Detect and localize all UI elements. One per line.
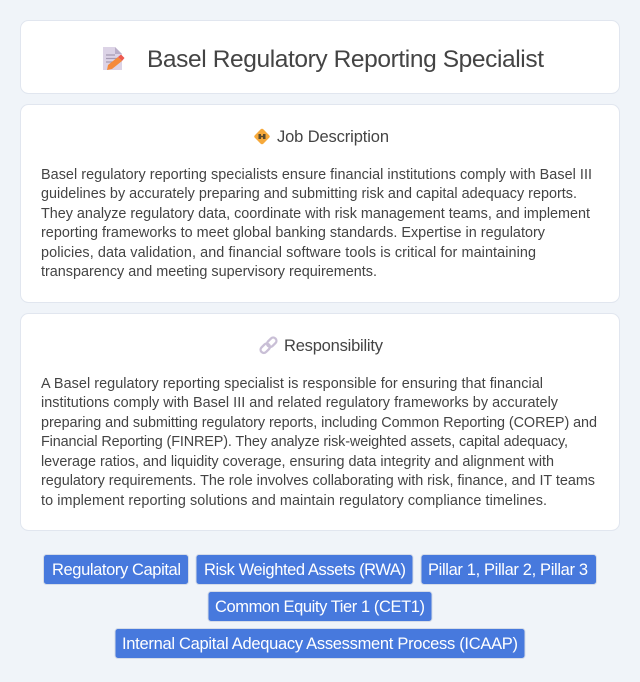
- text block: responsibility: Financial Reporting (FINREP). They analyze risk-weighted assets, capital adequacy,: [41, 434, 568, 450]
- text block: job description: [41, 167, 592, 280]
- tag: common equity tier 1: [208, 592, 432, 622]
- heading: responsibility: Responsibility: [284, 337, 384, 355]
- title: Basel Regulatory Reporting Specialist: [147, 46, 544, 73]
- text block: responsibility: A Basel regulatory reporting specialist is responsible for ensuring that financial: [41, 376, 543, 392]
- text block: responsibility: institutions comply with Basel III and related regulatory frameworks by accurately: [41, 395, 559, 411]
- text block: responsibility: leverage ratios, and liquidity coverage, ensuring data integrity and alignment with: [41, 454, 554, 470]
- icon: orange diamond: [254, 128, 270, 145]
- text block: job description: reporting frameworks to meet global banking standards. Expertise in regulatory: [41, 225, 546, 241]
- panel: job description: [20, 104, 620, 302]
- heading: job description: Job Description: [277, 128, 389, 146]
- text block: job description: Basel regulatory reporting specialists ensure financial institutions comply with Basel III: [41, 167, 592, 183]
- tag: icaap: Internal Capital Adequacy Assessment Process (ICAAP): [122, 635, 518, 653]
- tag: risk weighted assets: [196, 554, 413, 584]
- icon: document with pencil: [103, 47, 124, 70]
- text block: responsibility: preparing and submitting regulatory reports, including Common Reporting (COREP) and: [41, 415, 597, 431]
- text block: job description: guidelines by accurately preparing and submitting risk and capital adequacy reports.: [41, 186, 577, 202]
- icon: chain link: [259, 336, 278, 354]
- tag: common equity tier 1: Common Equity Tier 1 (CET1): [215, 598, 425, 616]
- text block: job description: policies, data validation, and financial software tools is critical for maintaining: [41, 245, 536, 261]
- tag: risk weighted assets: Risk Weighted Assets (RWA): [204, 561, 406, 579]
- tag: pillars: [421, 554, 596, 584]
- text block: responsibility: to implement reporting solutions and maintain regulatory compliance timelines.: [41, 493, 547, 509]
- text block: responsibility: [41, 376, 597, 509]
- panel: responsibility: [20, 314, 620, 530]
- tag: regulatory capital: [44, 554, 188, 584]
- text block: job description: transparency and meeting supervisory requirements.: [41, 264, 377, 280]
- text block: job description: They analyze regulatory data, coordinate with risk management teams, and implement: [41, 206, 590, 222]
- tag: icaap: [115, 628, 525, 658]
- tag: pillars: Pillar 1, Pillar 2, Pillar 3: [428, 561, 588, 579]
- panel: header: [20, 20, 620, 94]
- tag: regulatory capital: Regulatory Capital: [52, 561, 181, 579]
- text block: responsibility: regulatory requirements. The role involves collaborating with risk, finance, and IT teams: [41, 473, 595, 489]
